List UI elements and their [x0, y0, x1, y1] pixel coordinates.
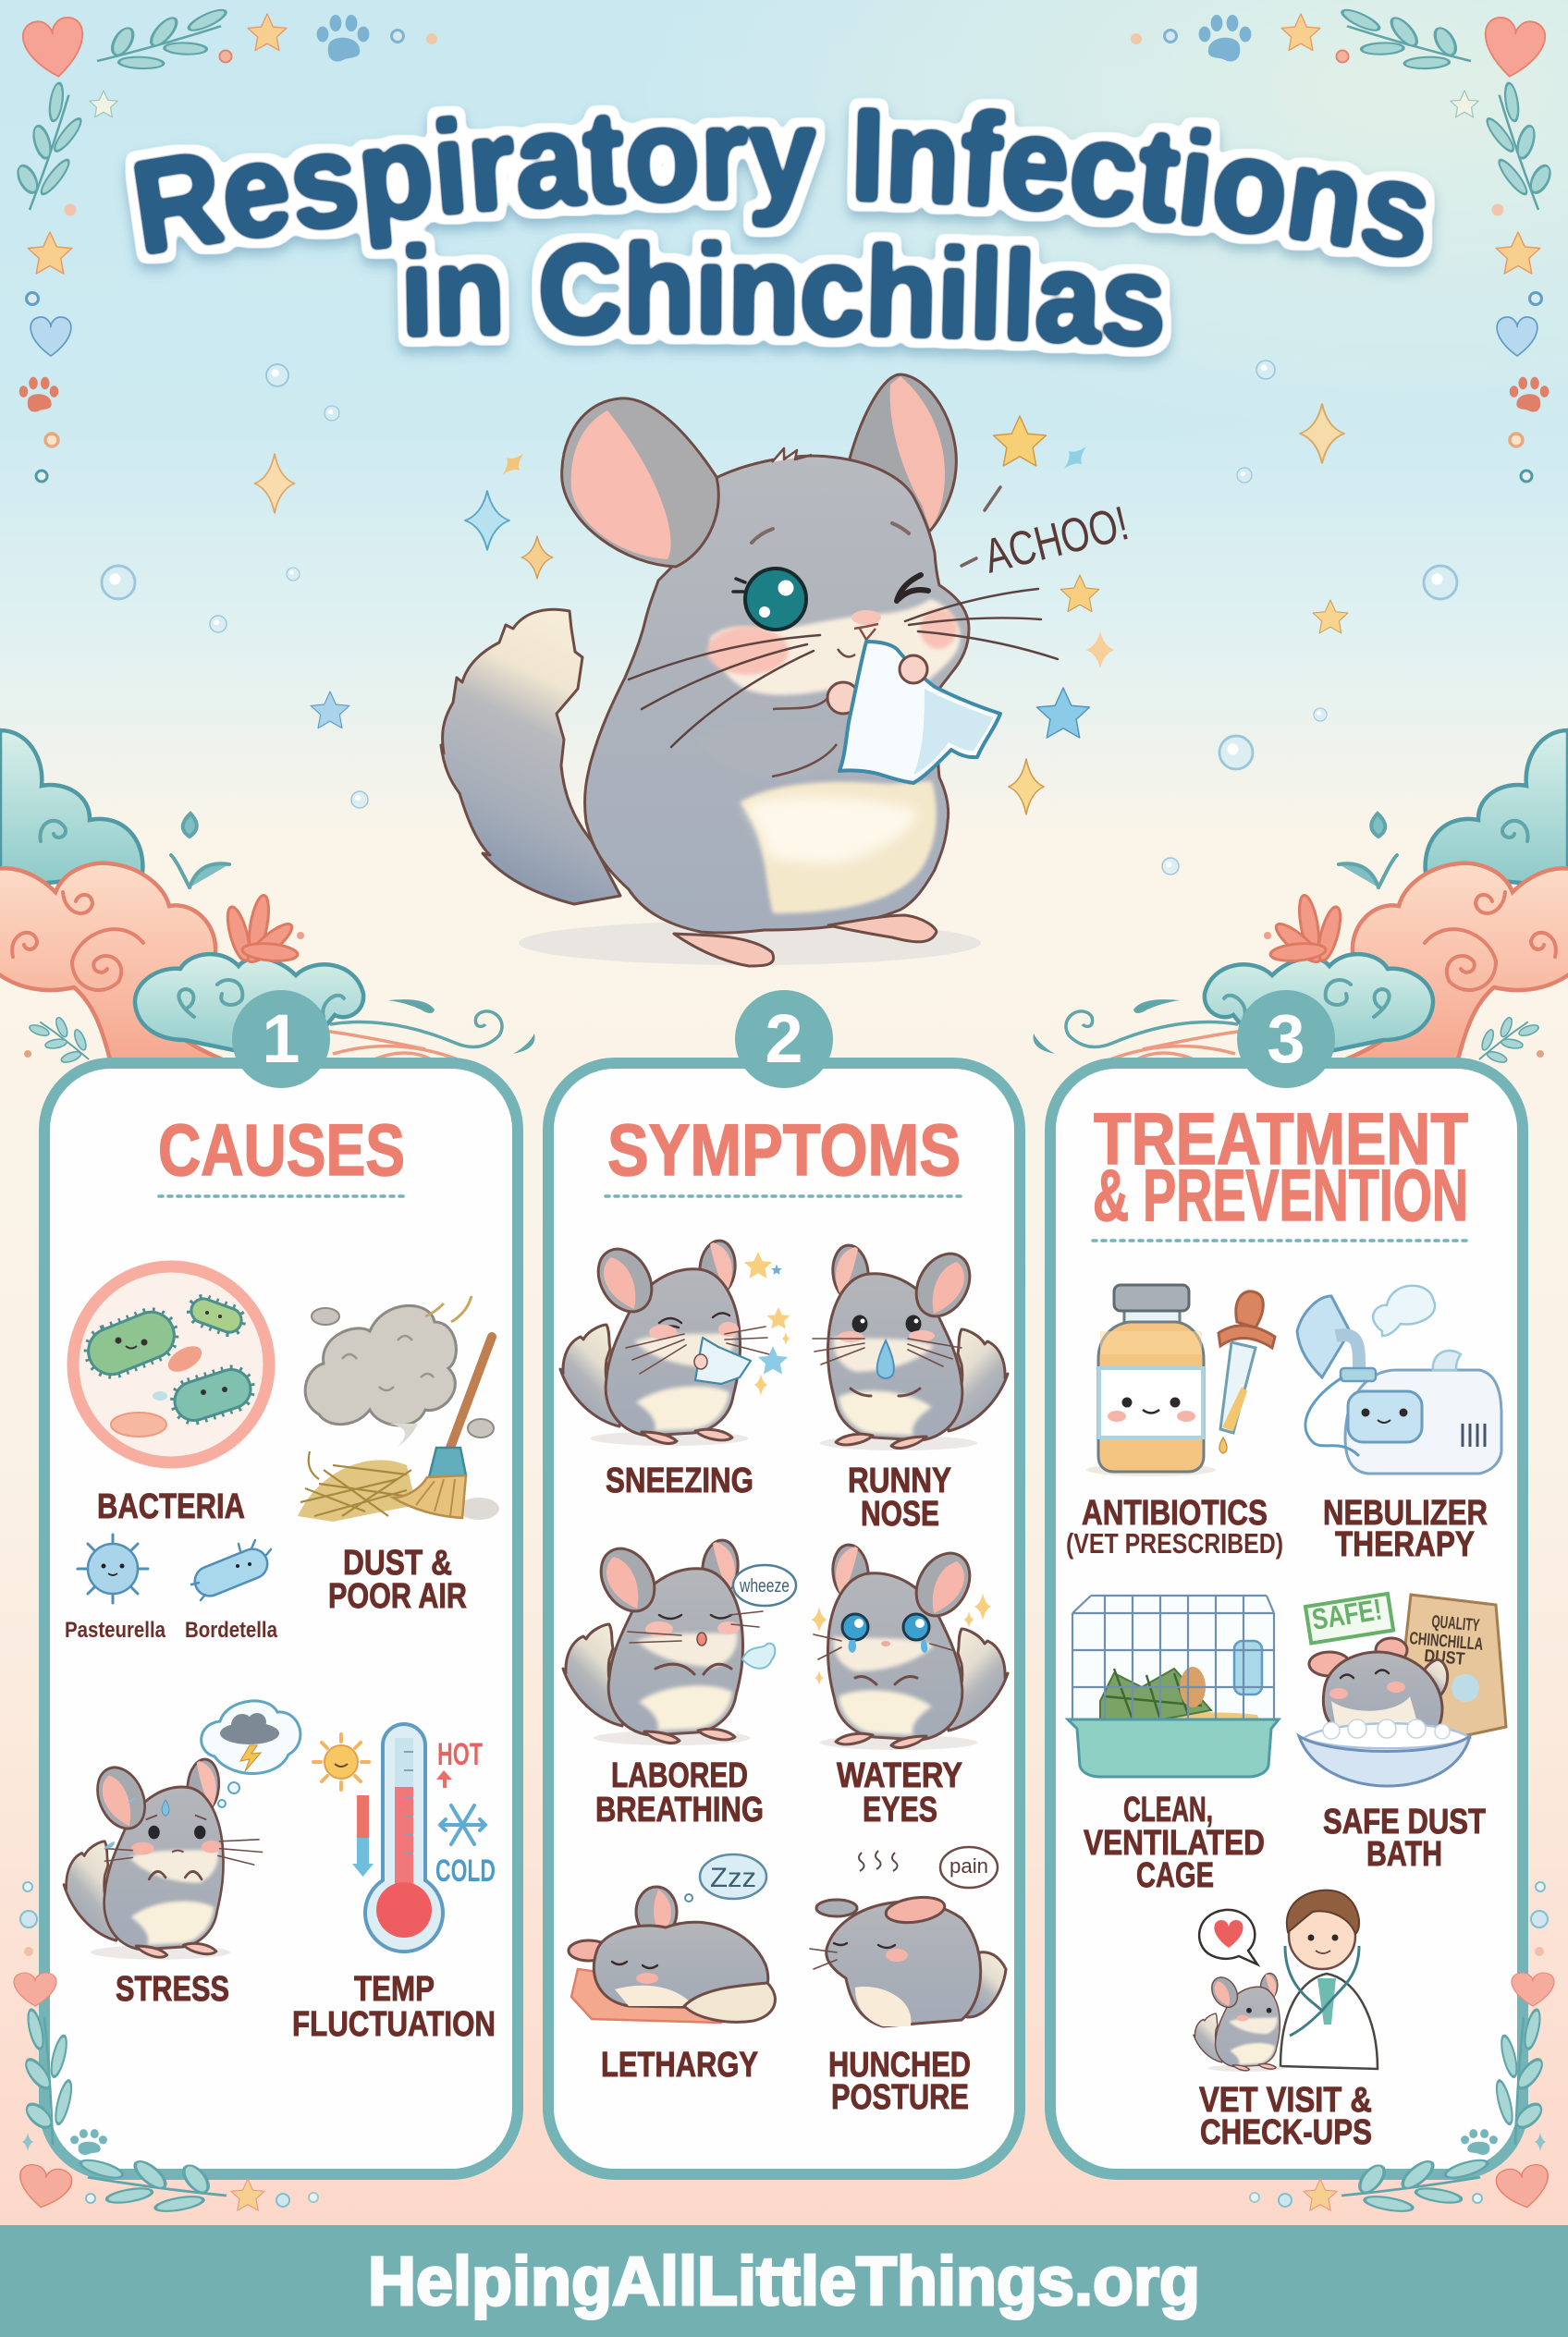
icon: vet with stethoscope: [1256, 1890, 1378, 2069]
label: labored breathing: [595, 1756, 764, 1829]
label: cold: COLD: [435, 1854, 496, 1889]
label: watery eyes: [837, 1756, 962, 1829]
icon: dust bag: QUALITY: [1431, 1612, 1480, 1636]
label: safe dust bath: BATH: [1366, 1835, 1442, 1874]
brows: [752, 523, 909, 543]
left paw: [827, 682, 859, 714]
title: [118, 98, 1442, 371]
right cheek: [920, 608, 957, 649]
icon: cage: [1068, 1596, 1279, 1777]
footer banner: HelpingAllLittleThings.org: [368, 2243, 1200, 2319]
decoration: top corners: [0, 6, 437, 482]
eye: [733, 569, 806, 630]
icon: thought cloud with storm: [202, 1701, 300, 1807]
footer banner: [0, 2225, 1568, 2337]
heading: causes: CAUSES: [158, 1108, 405, 1191]
icon: lethargic chinchilla on cushion: [569, 1887, 775, 2023]
label: pasteurella: Pasteurella: [65, 1618, 166, 1643]
icon: pasteurella: [78, 1535, 148, 1603]
label: bacteria: BACTERIA: [97, 1487, 245, 1526]
badge 3: [1237, 990, 1335, 1088]
icon: dust bag: DUST: [1424, 1646, 1466, 1670]
heading: treatment and prevention: [1093, 1097, 1468, 1241]
label: runny nose: RUNNY: [848, 1462, 951, 1500]
icon: safe sign: SAFE!: [1309, 1592, 1384, 1636]
icon: snowflake: [440, 1805, 485, 1844]
icon: medicine bottle: [1086, 1285, 1216, 1476]
arrow: falling temperature: [352, 1795, 374, 1877]
panel: causes: [44, 990, 518, 2174]
achoo exclamation: ACHOO!: [979, 496, 1133, 584]
label: antibiotics: ANTIBIOTICS: [1082, 1494, 1268, 1533]
decoration: right clouds: [1033, 730, 1568, 1077]
label: nebulizer therapy: THERAPY: [1335, 1525, 1475, 1564]
label: temp fluctuation: FLUCTUATION: [292, 2005, 496, 2044]
right ear: [850, 374, 956, 531]
label: safe dust bath: [1323, 1803, 1486, 1874]
label: dust and poor air: DUST &: [343, 1544, 452, 1583]
icon: bordetella: [190, 1540, 272, 1600]
face muzzle: [710, 599, 961, 695]
callout: pain: pain: [949, 1854, 988, 1878]
callout: pain: [940, 1847, 998, 1888]
label: hunched posture: POSTURE: [831, 2078, 969, 2117]
icon: dust bag: [1401, 1595, 1506, 1744]
icon: breath puff: [742, 1644, 775, 1669]
icon: sun: [313, 1734, 369, 1790]
label: hot: HOT: [437, 1737, 483, 1772]
heading: treatment and prevention: TREATMENT: [1094, 1097, 1468, 1180]
label: temp fluctuation: TEMP: [354, 1970, 435, 2009]
label: clean ventilated cage: CAGE: [1136, 1856, 1214, 1895]
label: clean ventilated cage: VENTILATED: [1084, 1824, 1265, 1863]
label: vet visit and check-ups: CHECK-UPS: [1200, 2113, 1372, 2152]
decoration: left clouds: [0, 730, 535, 1077]
label: labored breathing: BREATHING: [595, 1791, 764, 1829]
label: hunched posture: HUNCHED: [828, 2046, 971, 2085]
icon: heart speech bubble: [1199, 1910, 1257, 1964]
label: dust and poor air: POOR AIR: [328, 1577, 467, 1616]
label: hunched posture: [828, 2046, 971, 2117]
nose: [838, 610, 881, 656]
label: clean ventilated cage: CLEAN,: [1123, 1791, 1213, 1829]
icon: thermometer: [365, 1724, 443, 1952]
badge 1: 1: [262, 1000, 300, 1077]
icon: chinchilla in dust bath: [1299, 1638, 1470, 1786]
label: labored breathing: LABORED: [611, 1756, 748, 1795]
arm outline: [772, 695, 837, 777]
icon: hunched chinchilla: [810, 1851, 1006, 2026]
label: watery eyes: EYES: [863, 1791, 937, 1829]
title: in Chinchillas: [390, 224, 1178, 371]
winking eye: [897, 575, 928, 601]
icon: stressed chinchilla: [64, 1757, 263, 1960]
badge 2: [735, 990, 833, 1088]
left ear: [562, 398, 718, 567]
label: temp fluctuation: [292, 1970, 496, 2044]
tissue shading: [913, 689, 993, 775]
panel: symptoms: [548, 990, 1020, 2174]
label: runny nose: NOSE: [861, 1495, 939, 1534]
arrow: up: [436, 1770, 452, 1788]
icon: nebulizer: [1297, 1286, 1501, 1474]
head and body: [585, 456, 969, 933]
callout: wheeze: wheeze: [739, 1576, 790, 1597]
label: nebulizer therapy: NEBULIZER: [1323, 1494, 1488, 1533]
label: vet visit and check-ups: VET VISIT &: [1199, 2081, 1372, 2120]
label: stress: STRESS: [116, 1970, 229, 2009]
heading: symptoms: SYMPTOMS: [607, 1108, 961, 1191]
title: Respiratory Infections: [118, 98, 1442, 281]
decoration: top right corner: [1131, 6, 1568, 482]
tissue: [839, 642, 1000, 783]
arm: [695, 719, 851, 778]
sparkles and stars around chinchilla: [254, 404, 1348, 814]
tail: [441, 609, 620, 904]
right foot: [828, 915, 937, 942]
label: runny nose: [848, 1462, 951, 1534]
icon: dust cloud and broom: [298, 1296, 499, 1522]
head fur tuft: [772, 448, 812, 462]
label: safe dust bath: SAFE DUST: [1323, 1803, 1486, 1841]
label: antibiotics: (VET PRESCRIBED): [1066, 1527, 1283, 1560]
cheek: [707, 627, 789, 675]
decoration: bottom right corner: [1250, 1882, 1554, 2214]
icon: labored breathing chinchilla: [563, 1538, 763, 1745]
icon: runny nose chinchilla: [813, 1243, 1008, 1450]
badge 3: 3: [1267, 1000, 1305, 1077]
callout: wheeze: [733, 1565, 796, 1606]
badge 1: [232, 990, 330, 1088]
label: antibiotics: [1066, 1494, 1283, 1560]
whiskers: [629, 589, 1058, 747]
label: sneezing: SNEEZING: [606, 1462, 753, 1500]
label: dust and poor air: [328, 1544, 467, 1616]
label: bordetella: Bordetella: [185, 1618, 278, 1643]
decoration: bottom left corner: [14, 1882, 318, 2214]
belly: [740, 781, 937, 913]
icon: watery eyes chinchilla: [812, 1543, 1008, 1750]
left foot: [674, 934, 774, 966]
inner left ear: [571, 410, 671, 559]
panel: treatment and prevention: [1050, 990, 1523, 2174]
label: clean ventilated cage: [1084, 1791, 1265, 1895]
label: lethargy: LETHARGY: [601, 2046, 758, 2085]
label: nebulizer therapy: [1323, 1494, 1488, 1564]
icon: sneezing chinchilla: [560, 1239, 790, 1446]
right paw: [900, 655, 927, 683]
main chinchilla sneezing into a tissue: [441, 374, 1058, 966]
icon: chinchilla at vet: [1194, 1973, 1283, 2072]
badge 2: 2: [765, 1000, 803, 1077]
label: vet visit and check-ups: [1199, 2081, 1372, 2152]
label: watery eyes: WATERY: [837, 1756, 962, 1795]
icon: dust bag: CHINCHILLA: [1409, 1629, 1484, 1655]
floating bubbles: [102, 361, 1457, 875]
callout: zzz: [685, 1854, 766, 1902]
icon: bacteria dish: [73, 1266, 269, 1462]
callout: zzz: Zzz: [710, 1863, 756, 1893]
icon: dropper: [1219, 1291, 1275, 1453]
